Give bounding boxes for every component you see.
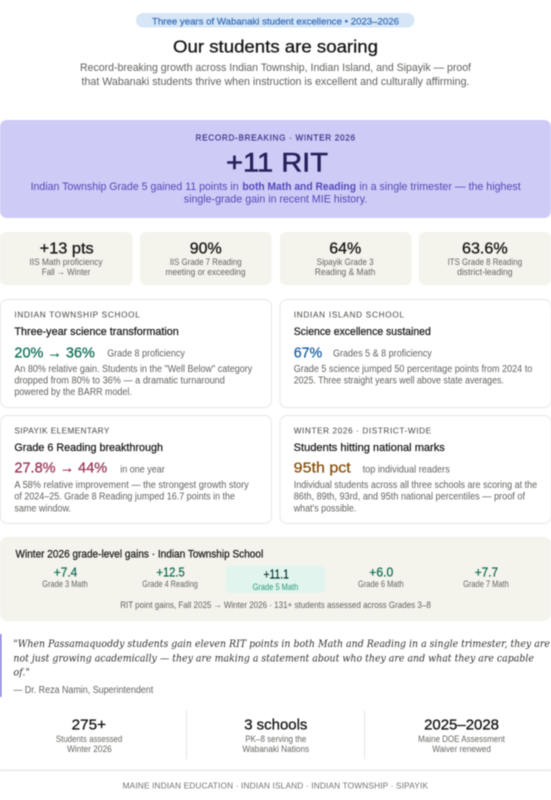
footer stat: waiver: Waiver renewed: [432, 744, 491, 755]
panel: Sipayik Elementary: same window.: [14, 503, 71, 514]
hero description: [31, 181, 521, 206]
hero description: Indian Township Grade 5 gained 11 points in: [31, 181, 239, 193]
quote attribution: — Dr. Reza Namin, Superintendent: [13, 685, 153, 696]
stat card: Sipayik Grade 3: Reading & Math: [315, 267, 375, 278]
footer text: MAINE INDIAN EDUCATION · INDIAN ISLAND · INDIAN TOWNSHIP · SIPAYIK: [123, 780, 428, 790]
footer stat: waiver: 2025–2028: [424, 716, 499, 733]
intro text: that Wabanaki students thrive when instruction is excellent and culturally affirming.: [82, 76, 470, 88]
gain: Grade 7 Math: +7.7: [475, 565, 498, 579]
footer stat: students assessed: 275+: [72, 716, 106, 733]
stat card: Sipayik Grade 3: [280, 232, 412, 285]
gain: Grade 7 Math: Grade 7 Math: [463, 579, 509, 589]
gain: Grade 5 Math highlighted: +11.1: [264, 568, 289, 582]
header badge: Three years of Wabanaki student excellence • 2023–2026: [152, 17, 399, 28]
header badge: [136, 13, 414, 28]
panel: Sipayik Elementary: A 58% relative improvement — the strongest growth story: [14, 480, 249, 491]
footer stat: waiver: Maine DOE Assessment: [418, 734, 505, 745]
gain: Grade 4 Reading: [142, 565, 198, 589]
footer stat: schools: 3 schools: [244, 716, 307, 733]
intro text: Record-breaking growth across Indian Township, Indian Island, and Sipayik — proof: [80, 62, 472, 74]
stat card: ITS Grade 8: 63.6%: [462, 240, 508, 257]
stat card: IIS Math: +13 pts: [40, 240, 94, 257]
panel: district-wide: 95th pct: [294, 461, 351, 477]
gain: Grade 4 Reading: Grade 4 Reading: [142, 579, 198, 589]
footer stat: waiver: [418, 716, 505, 755]
gain: Grade 6 Math: +6.0: [369, 565, 393, 579]
panel: Indian Township School: Three-year science transformation: [14, 326, 179, 338]
panel: Indian Island School: Grade 5 science jumped 50 percentage points from 2024 to: [294, 364, 533, 375]
gain: Grade 4 Reading: +12.5: [156, 565, 185, 579]
gain: Grade 6 Math: [358, 565, 404, 589]
panel: Sipayik Elementary: [0, 416, 272, 524]
panel: Indian Island School: [280, 300, 551, 408]
quote: of.": [13, 666, 30, 678]
hero number: +11 RIT: [226, 148, 328, 178]
stat card: ITS Grade 8: ITS Grade 8 Reading: [448, 257, 522, 268]
stat card: IIS Grade 7: IIS Grade 7 Reading: [170, 257, 242, 268]
panel: Indian Township School: [0, 300, 272, 408]
gains heading: Winter 2026 grade-level gains · Indian Township School: [16, 549, 263, 561]
panel: district-wide: Students hitting national marks: [294, 442, 445, 454]
quote: [0, 634, 550, 697]
panel: Indian Island School: 2025. Three straight years well above state averages.: [294, 376, 504, 387]
gain: Grade 6 Math: Grade 6 Math: [358, 579, 404, 589]
panel: Indian Township School: INDIAN TOWNSHIP SCHOOL: [14, 310, 140, 319]
panel: Indian Township School: Grade 8 proficiency: [107, 348, 185, 360]
gain: Grade 7 Math: [463, 565, 509, 589]
panel: grade-level gains: [0, 537, 551, 621]
panel: district-wide: what's possible.: [293, 503, 356, 514]
panel: Indian Township School: 20% → 36%: [14, 345, 95, 361]
stat card: IIS Math: [0, 232, 132, 285]
panel: Indian Island School: 67%: [294, 345, 322, 361]
panel: Indian Township School: An 80% relative gain. Students in the "Well Below" category: [14, 364, 252, 375]
panel: Sipayik Elementary: of 2024–25. Grade 8 Reading jumped 16.7 points in the: [14, 492, 235, 503]
footer stat: students assessed: [56, 716, 122, 755]
stat card: IIS Math: Fall → Winter: [42, 267, 90, 278]
stat card: Sipayik Grade 3: Sipayik Grade 3: [317, 257, 374, 268]
panel: Indian Island School: INDIAN ISLAND SCHOOL: [294, 310, 404, 319]
panel: Sipayik Elementary: Grade 6 Reading breakthrough: [14, 442, 163, 454]
footer stat: schools: Wabanaki Nations: [242, 744, 309, 755]
panel: Sipayik Elementary: 27.8% → 44%: [14, 461, 107, 477]
stat card: IIS Grade 7: meeting or exceeding: [166, 267, 246, 278]
footer stat: students assessed: Students assessed: [56, 734, 122, 745]
stat card: IIS Grade 7: [140, 232, 272, 285]
gain: Grade 3 Math: Grade 3 Math: [42, 579, 88, 589]
panel: record-breaking hero: [0, 120, 551, 218]
footer stat: students assessed: Winter 2026: [67, 744, 112, 755]
panel: Sipayik Elementary: in one year: [120, 463, 165, 475]
hero description: in a single trimester — the highest: [359, 181, 521, 193]
panel: Indian Island School: Science excellence sustained: [294, 326, 431, 338]
panel: Indian Island School: Grades 5 & 8 proficiency: [333, 348, 432, 360]
panel: district-wide: 86th, 89th, 93rd, and 95th national percentiles — proof of: [294, 492, 525, 503]
panel: Sipayik Elementary: SIPAYIK ELEMENTARY: [14, 427, 110, 436]
panel: district-wide: top individual readers: [363, 463, 450, 475]
gain: Grade 3 Math: +7.4: [54, 565, 77, 579]
gain: Grade 5 Math highlighted: Grade 5 Math: [253, 582, 298, 592]
stat card: ITS Grade 8: district-leading: [457, 267, 513, 278]
hero description: single-grade gain in recent MIE history.: [184, 194, 367, 206]
stat card: IIS Grade 7: 90%: [190, 240, 222, 257]
panel: Indian Township School: powered by the BARR model.: [14, 387, 132, 398]
intro text: [80, 62, 472, 88]
hero eyebrow: RECORD-BREAKING · WINTER 2026: [196, 134, 355, 143]
panel: Indian Township School: dropped from 80% to 36% — a dramatic turnaround: [14, 376, 225, 387]
gains footnote: RIT point gains, Fall 2025 → Winter 2026 · 131+ students assessed across Grades 3–8: [120, 600, 431, 611]
stat card: Sipayik Grade 3: 64%: [329, 240, 361, 257]
panel: district-wide: [280, 416, 551, 524]
gain: Grade 3 Math: [42, 565, 88, 589]
title: Our students are soaring: [173, 36, 378, 56]
footer stat: schools: PK–8 serving the: [245, 734, 306, 745]
hero description: both Math and Reading: [242, 181, 356, 193]
stat card: IIS Math: IIS Math proficiency: [30, 257, 103, 268]
panel: district-wide: WINTER 2026 · DISTRICT-WIDE: [294, 427, 432, 436]
stat card: ITS Grade 8: [419, 232, 551, 285]
footer stat: schools: [242, 716, 309, 755]
gain: Grade 5 Math highlighted: [226, 565, 325, 593]
